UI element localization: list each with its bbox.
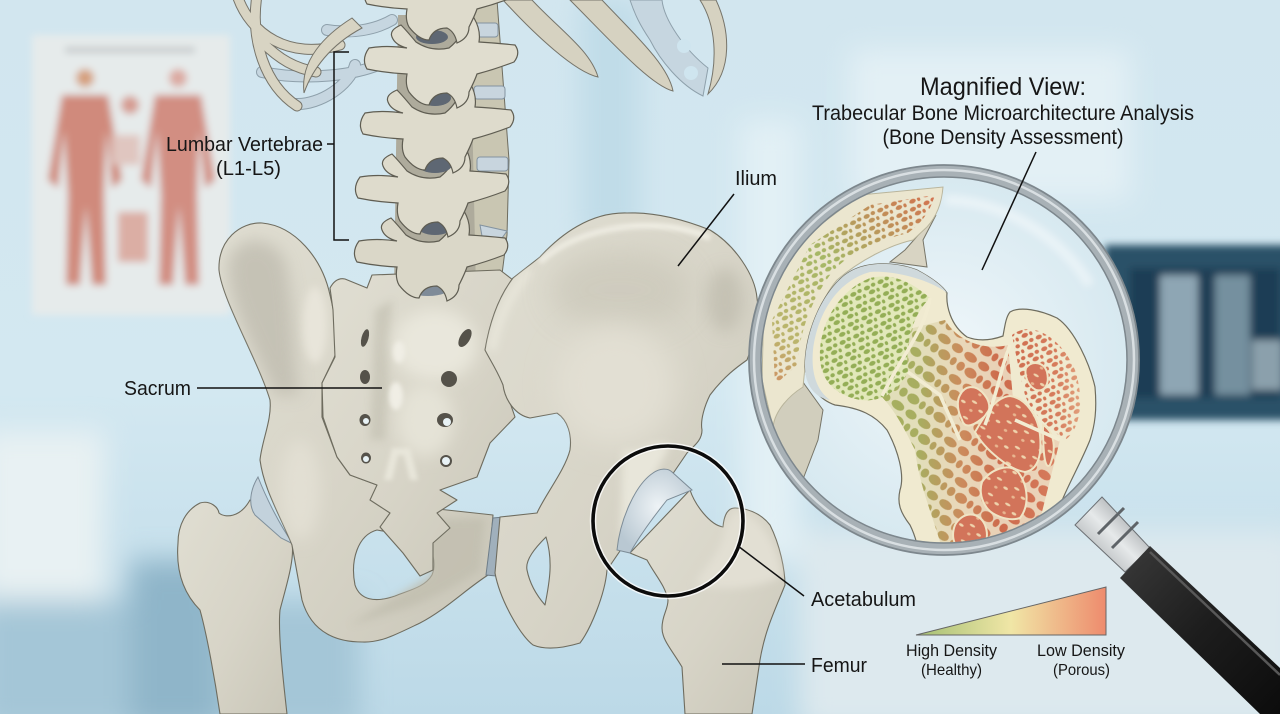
callout circle: hip joint [593, 446, 743, 596]
heading: magnified view: Magnified View: [920, 73, 1086, 101]
pelvis skeleton [178, 0, 785, 714]
sacrum and coccyx [322, 270, 515, 576]
acetabular pelvic bone section [762, 187, 943, 487]
leader: magnified view [982, 152, 1036, 270]
density legend: High Density [906, 641, 997, 660]
left hip cartilage [251, 477, 293, 544]
right femur [630, 490, 785, 714]
magnifying glass handle [1075, 497, 1280, 714]
background monitor [1105, 245, 1280, 420]
label: lumbar vertebrae: (L1-L5) [216, 158, 281, 180]
magnifier lens with trabecular bone [749, 165, 1139, 560]
label: lumbar vertebrae [166, 52, 349, 240]
label: ilium [678, 168, 777, 266]
density legend [906, 587, 1125, 679]
label: lumbar vertebrae: Lumbar Vertebrae [166, 134, 323, 156]
label: sacrum: Sacrum [124, 378, 191, 400]
femur cross-section [805, 264, 1096, 560]
density legend: (Healthy) [921, 662, 982, 679]
density legend: (Porous) [1053, 662, 1110, 679]
lumbar vertebrae [354, 0, 518, 301]
femoral head cartilage [617, 469, 692, 553]
left femur [178, 500, 293, 714]
heading: magnified view: Trabecular Bone Microarchitecture Analysis [812, 102, 1194, 125]
label: acetabulum: Acetabulum [811, 589, 916, 611]
left hip bone [219, 223, 493, 642]
pubic symphysis [486, 517, 503, 576]
label: acetabulum [738, 546, 916, 611]
heading: magnified view: (Bone Density Assessment) [882, 126, 1124, 149]
density legend: Low Density [1037, 641, 1125, 660]
heading: magnified view [812, 73, 1194, 149]
magnifier ring [749, 165, 1139, 555]
lens reflection [945, 200, 1090, 285]
right ilium and pubic ramus [485, 213, 758, 648]
label: ilium: Ilium [735, 168, 777, 190]
label: femur: Femur [811, 655, 867, 677]
wall poster: anatomy chart [32, 35, 230, 315]
ribs and costal cartilage [237, 0, 727, 106]
vertebral column bodies and discs [394, 0, 509, 290]
